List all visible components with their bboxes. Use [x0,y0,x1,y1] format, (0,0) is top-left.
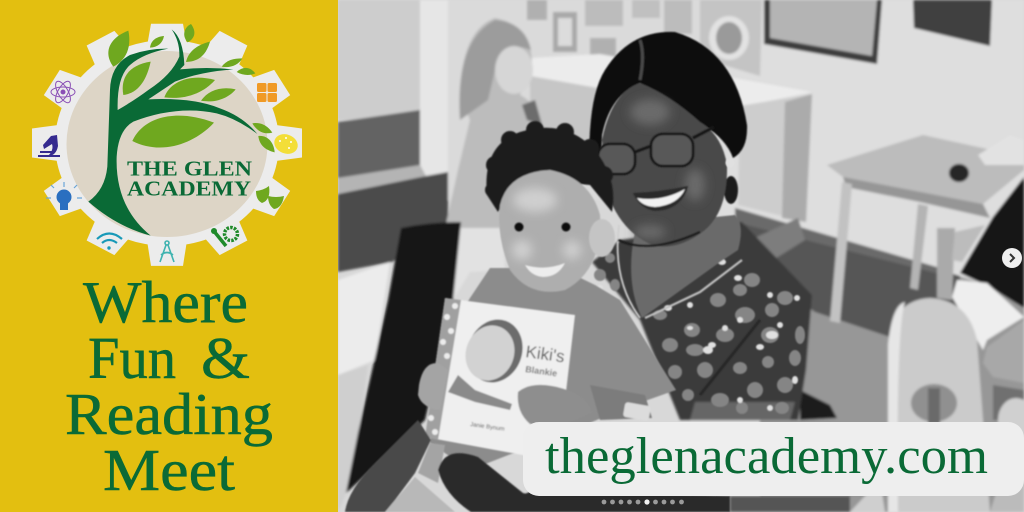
left white seat and cushion [338,262,390,375]
scrubs pattern [594,253,805,414]
woman's face highlights [630,99,705,239]
tagline: Meet [103,437,236,503]
framed pictures [527,0,547,20]
icon: microscope [38,135,60,157]
child's hands [417,362,436,408]
woman's hair [588,30,748,159]
woman's hands and arms [438,452,526,512]
tagline [65,269,273,503]
floor right [735,208,1024,512]
book title: Kiki's [524,342,566,366]
beige disc [66,51,268,237]
logo wordmark: THE GLEN [127,156,252,180]
icon: tools [211,228,238,246]
right seated child [960,177,1024,308]
tagline: & [201,325,250,391]
shoe [800,390,837,420]
book illustration [472,318,524,384]
icon: wifi [97,234,122,250]
icon: atom [51,79,75,105]
woman's smile [633,186,688,211]
woman's face [602,83,727,247]
back table [530,54,812,106]
url pill [523,422,1024,496]
carousel next button [1002,248,1022,268]
book [425,298,575,456]
right table [827,135,1024,204]
website address: theglenacademy.com [545,428,988,485]
background girl [445,18,538,228]
right chair [888,298,990,512]
child's shirt [430,268,676,470]
icon: palette [271,131,301,157]
child's hair [485,121,613,212]
glasses [598,134,693,174]
book: Blankie [525,364,558,378]
carousel dots [602,499,684,505]
logo wordmark: ACADEMY [127,176,251,200]
tagline: Fun [88,325,176,391]
gear [32,24,302,266]
woman's chest base and scrubs [592,222,812,420]
scrub seam [700,320,760,395]
child's eyes [514,222,524,232]
black jacket [346,222,461,493]
tagline: Reading [65,381,273,447]
earring [724,160,728,168]
logo wordmark [127,156,252,200]
tree [88,24,275,236]
wall and door frame [338,0,423,120]
woman's neck and chest [631,215,741,318]
icon: compass [160,241,174,262]
panel: yellow sidebar [0,0,338,512]
icon: theatre masks [256,186,284,209]
child's face [499,170,600,292]
logo: The Glen Academy [32,24,302,266]
child's smile [525,263,565,277]
tagline: Where [83,269,248,335]
lap [385,477,455,512]
icon: light bulb [46,182,82,210]
book: Janie Bynum [470,422,505,433]
icon: calculator [257,83,277,102]
photo: teacher and child with book [338,0,1024,512]
child's face highlights [512,188,581,260]
child's arm and wristband [590,385,652,420]
